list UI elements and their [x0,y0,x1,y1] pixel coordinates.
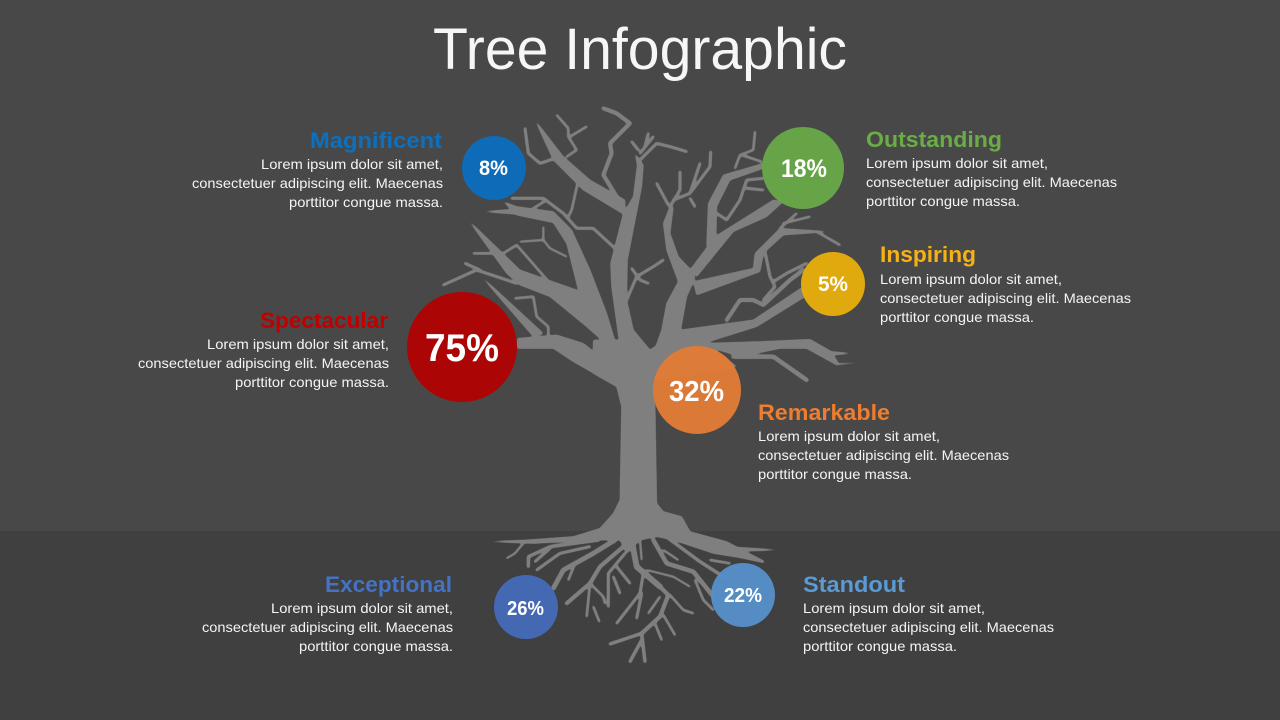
text block: Spectacular [138,308,389,390]
text block: Exceptional [202,572,453,654]
text block: Inspiring [880,242,1131,325]
text block: Remarkable: porttitor congue massa. [758,466,912,482]
text block: Spectacular: consectetuer adipiscing elit. Maecenas [138,355,389,371]
text block: Exceptional: Exceptional [325,572,452,597]
text block: Remarkable: Remarkable [758,400,890,425]
text block: Spectacular: Lorem ipsum dolor sit amet, [207,336,389,352]
text block: Inspiring: Lorem ipsum dolor sit amet, [880,271,1062,287]
text block: Outstanding: consectetuer adipiscing elit. Maecenas [866,174,1117,190]
text block: Magnificent [192,128,443,210]
circle: 22%: 22% [724,585,762,607]
text block: Magnificent: porttitor congue massa. [289,194,443,210]
text block: Remarkable [758,400,1009,482]
circle: 26%: 26% [507,598,544,620]
circle: 22% [711,563,775,627]
text block: Exceptional: porttitor congue massa. [299,638,453,654]
circle: 18% [762,127,844,209]
text block: Outstanding: porttitor congue massa. [866,193,1020,209]
text block: Standout: Standout [803,572,906,597]
tree illustration [443,108,872,662]
text block: Inspiring: consectetuer adipiscing elit. Maecenas [880,290,1131,306]
circle: 8%: 8% [479,157,508,180]
circle: 5%: 5% [818,273,848,296]
text block: Standout: Lorem ipsum dolor sit amet, [803,600,985,616]
text block: Magnificent: Magnificent [310,128,443,153]
text block: Inspiring: porttitor congue massa. [880,309,1034,325]
circle: 5% [801,252,865,316]
text block: Magnificent: Lorem ipsum dolor sit amet, [261,156,443,172]
text block: Magnificent: consectetuer adipiscing elit. Maecenas [192,175,443,191]
text block: Remarkable: consectetuer adipiscing elit. Maecenas [758,447,1009,463]
circle: 26% [494,575,558,639]
circle: 32% [653,346,741,434]
text block: Outstanding [866,127,1117,209]
text block: Inspiring: Inspiring [880,242,976,267]
circle: 75% [407,292,517,402]
circle: 18%: 18% [781,155,827,183]
tree trunk and roots [483,340,783,662]
text block: Exceptional: consectetuer adipiscing elit. Maecenas [202,619,453,635]
circle: 75%: 75% [425,327,499,370]
circle: 32%: 32% [669,376,724,408]
circle: 8% [462,136,526,200]
text block: Standout [803,572,1054,654]
text block: Outstanding: Lorem ipsum dolor sit amet, [866,155,1048,171]
text block: Standout: porttitor congue massa. [803,638,957,654]
text block: Outstanding: Outstanding [866,127,1002,152]
text block: Exceptional: Lorem ipsum dolor sit amet, [271,600,453,616]
text block: Spectacular: Spectacular [260,308,388,333]
text block: Spectacular: porttitor congue massa. [235,374,389,390]
tree crown branches [443,108,872,380]
text block: Standout: consectetuer adipiscing elit. Maecenas [803,619,1054,635]
title: Tree Infographic [433,17,847,82]
text block: Remarkable: Lorem ipsum dolor sit amet, [758,428,940,444]
